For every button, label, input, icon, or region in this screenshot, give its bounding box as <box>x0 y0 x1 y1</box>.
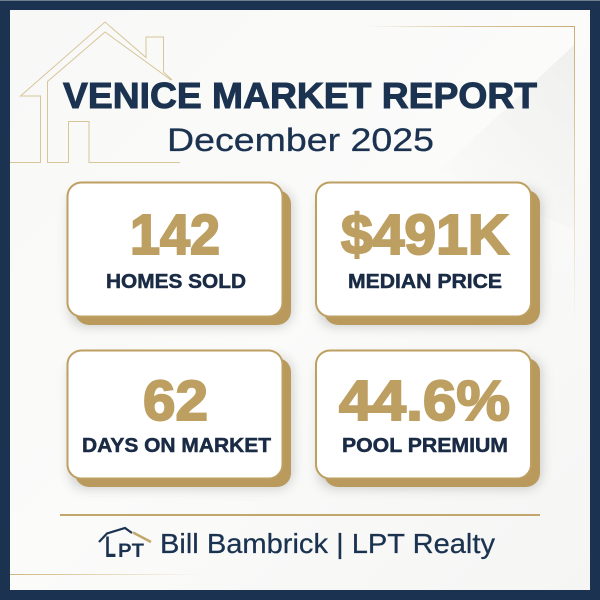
footer <box>99 528 495 564</box>
text: agent and brokerage: Bill Bambrick | LPT Realty <box>160 528 495 559</box>
stat: $491K: $491K <box>341 203 509 267</box>
panel: days on market <box>68 350 292 488</box>
stat: 44.6%: 44.6% <box>339 369 510 433</box>
stat: 62: 62 <box>143 369 208 433</box>
title: VENICE MARKET REPORT <box>63 75 537 116</box>
panel: median price <box>316 182 541 326</box>
icon: LPT logo: PT <box>118 541 144 562</box>
panel: homes sold <box>68 182 292 326</box>
label: pool premium: POOL PREMIUM <box>342 435 508 457</box>
label: median price: MEDIAN PRICE <box>348 271 502 293</box>
icon: LPT logo <box>99 528 151 564</box>
stat: 142: 142 <box>130 203 220 267</box>
panel: pool premium <box>316 350 541 488</box>
icon: decorative house outline <box>10 22 180 162</box>
subtitle: December 2025 <box>167 122 434 158</box>
icon: LPT logo: L <box>105 531 116 564</box>
label: homes sold: HOMES SOLD <box>106 271 246 293</box>
label: days on market: DAYS ON MARKET <box>82 435 271 457</box>
footer divider <box>60 514 540 516</box>
